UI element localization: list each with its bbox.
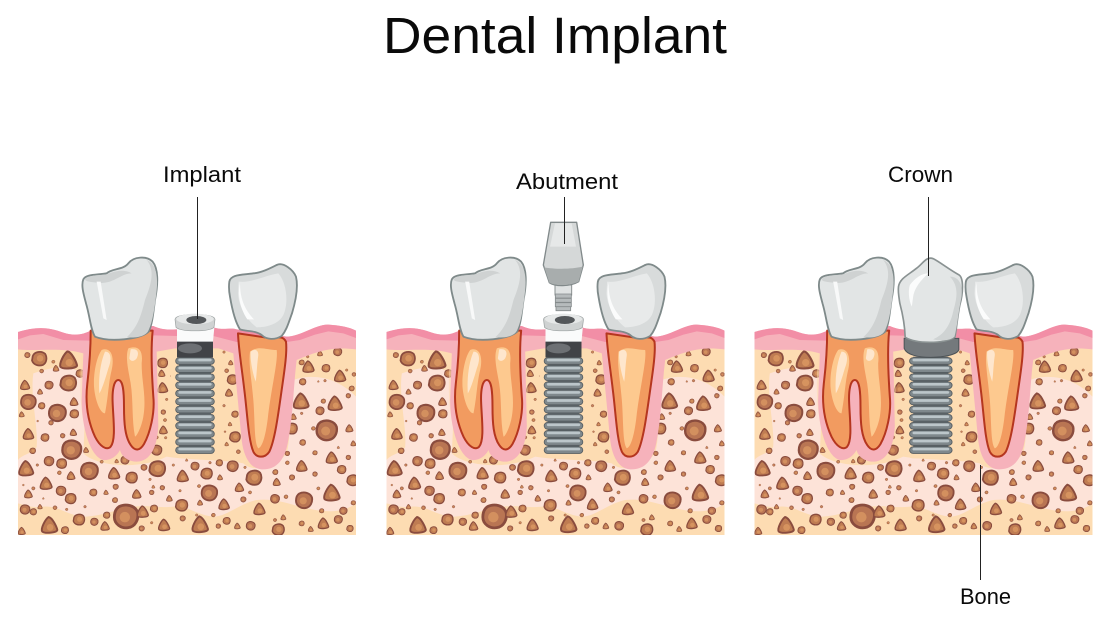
- panel: abutment: [386, 258, 727, 535]
- implant screw: [539, 314, 587, 458]
- label: Implant: Implant: [163, 162, 241, 187]
- jaw with bone, gum and natural teeth: [386, 258, 727, 535]
- implant screw: [171, 314, 219, 458]
- leader line: Crown: [928, 197, 929, 276]
- jaw with bone, gum and natural teeth: [18, 258, 358, 535]
- icon: abutment piece: [543, 222, 583, 311]
- leader line: Implant: [197, 197, 198, 319]
- panel: crown: [754, 258, 1095, 535]
- icon: crown: [898, 258, 962, 342]
- jaw with bone, gum and natural teeth: [754, 258, 1095, 535]
- leader line: Bone: [980, 465, 981, 580]
- label: Crown: Crown: [888, 162, 953, 187]
- label: Abutment: Abutment: [516, 169, 618, 194]
- title: Dental Implant: [383, 7, 727, 64]
- implant screw threads: [906, 352, 956, 458]
- label: Bone: Bone: [960, 584, 1011, 609]
- panel: implant: [18, 258, 358, 535]
- icon: collar under crown: [904, 338, 959, 357]
- leader line: Abutment: [564, 197, 565, 244]
